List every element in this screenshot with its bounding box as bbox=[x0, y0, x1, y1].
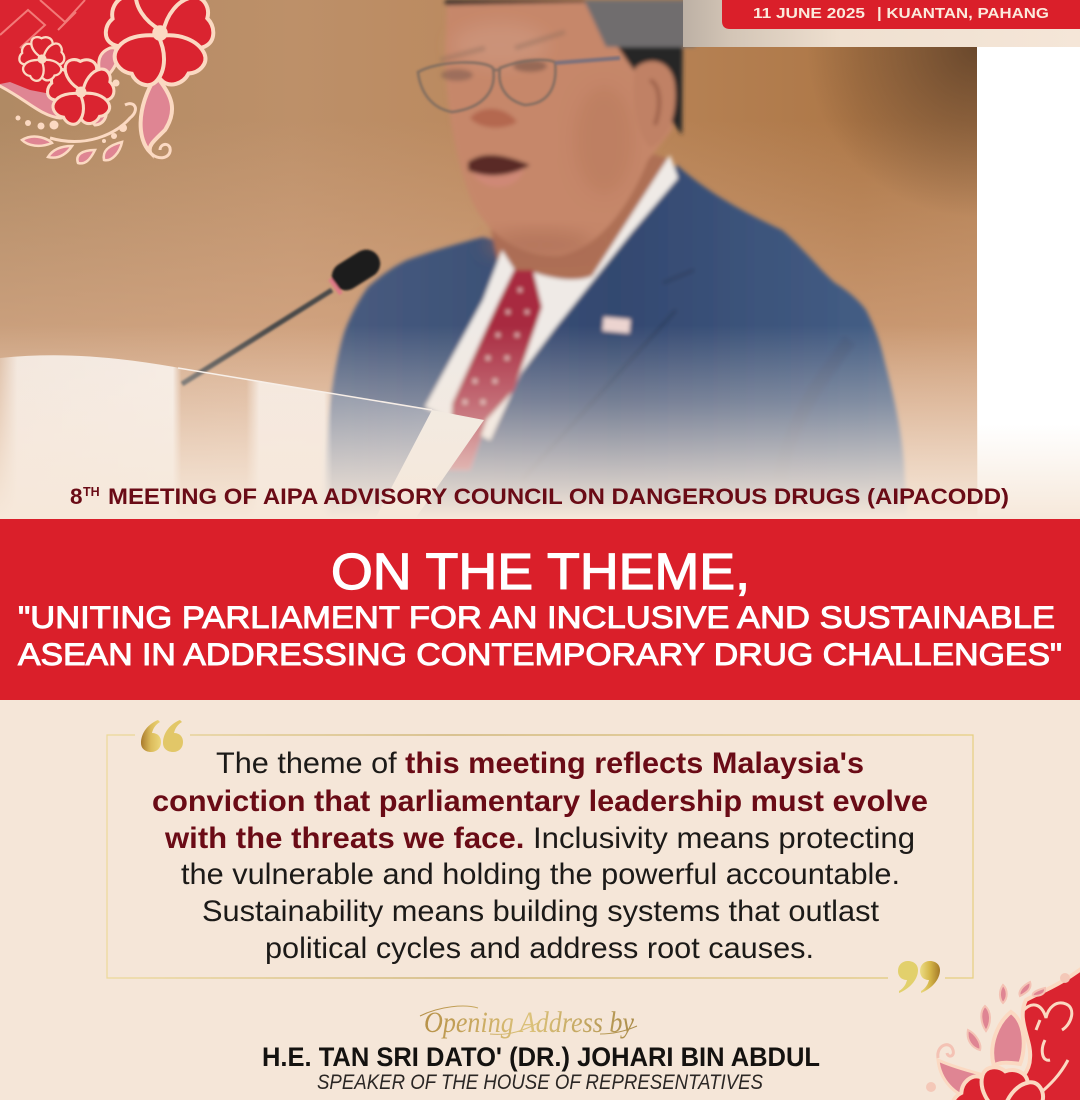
red theme banner bbox=[0, 519, 1080, 700]
bottom fade of photo bbox=[0, 325, 978, 519]
glasses bbox=[418, 58, 620, 112]
date and location pill: 11 JUNE 2025 bbox=[753, 6, 865, 22]
small flower bbox=[18, 37, 66, 83]
speaker name: H.E. TAN SRI DATO' (DR.) JOHARI BIN ABDUL bbox=[262, 1042, 820, 1072]
tie bbox=[448, 270, 542, 470]
quote text: The theme of this meeting reflects Malaysia's bbox=[216, 747, 864, 780]
quote text: Sustainability means building systems that outlast bbox=[202, 895, 879, 928]
flag pin bbox=[602, 317, 631, 333]
opening address script line: Opening Address by bbox=[424, 1006, 635, 1039]
subtitle: meeting name: TH bbox=[83, 485, 100, 499]
quote text bbox=[152, 747, 928, 965]
quote text: the vulnerable and holding the powerful accountable. bbox=[181, 858, 900, 891]
shirt collar bbox=[425, 155, 678, 440]
subtitle: meeting name: 8 bbox=[70, 484, 83, 509]
red theme banner: ON THE THEME, bbox=[331, 543, 750, 600]
big flower bbox=[102, 0, 217, 91]
neck bbox=[490, 150, 672, 282]
jacket bbox=[320, 165, 907, 519]
quote text: conviction that parliamentary leadership must evolve bbox=[152, 785, 928, 818]
lapel lines bbox=[522, 270, 694, 480]
floral ornament: top left bbox=[0, 0, 217, 163]
medium flower bbox=[45, 60, 117, 127]
red theme banner: "UNITING PARLIAMENT FOR AN INCLUSIVE AND SUSTAINABLE bbox=[18, 599, 1055, 635]
photo of speaker at the podium bbox=[0, 0, 977, 519]
closing quotation mark bbox=[898, 961, 940, 993]
microphone bbox=[182, 244, 385, 384]
glass podium bbox=[0, 355, 484, 519]
face bbox=[445, 0, 672, 256]
floral ornament: bottom right bbox=[926, 962, 1080, 1100]
brows, eyes, nose, mouth bbox=[440, 32, 565, 60]
red theme banner: ASEAN IN ADDRESSING CONTEMPORARY DRUG CHALLENGES" bbox=[18, 636, 1062, 672]
hair bbox=[445, 0, 683, 135]
subtitle: meeting name: MEETING OF AIPA ADVISORY COUNCIL ON DANGEROUS DRUGS (AIPACODD) bbox=[108, 484, 1009, 509]
date and location pill: | KUANTAN, PAHANG bbox=[877, 6, 1049, 22]
quote text: political cycles and address root causes. bbox=[265, 932, 814, 965]
opening quotation mark bbox=[141, 720, 183, 752]
white panel beside photo bbox=[977, 47, 1080, 519]
date and location pill bbox=[722, 0, 1080, 29]
quote frame bbox=[107, 735, 973, 978]
speaker role: SPEAKER OF THE HOUSE OF REPRESENTATIVES bbox=[317, 1070, 764, 1094]
ear bbox=[633, 61, 676, 148]
quote text: with the threats we face. Inclusivity means protecting bbox=[164, 822, 915, 855]
top band behind date pill bbox=[683, 0, 1080, 47]
